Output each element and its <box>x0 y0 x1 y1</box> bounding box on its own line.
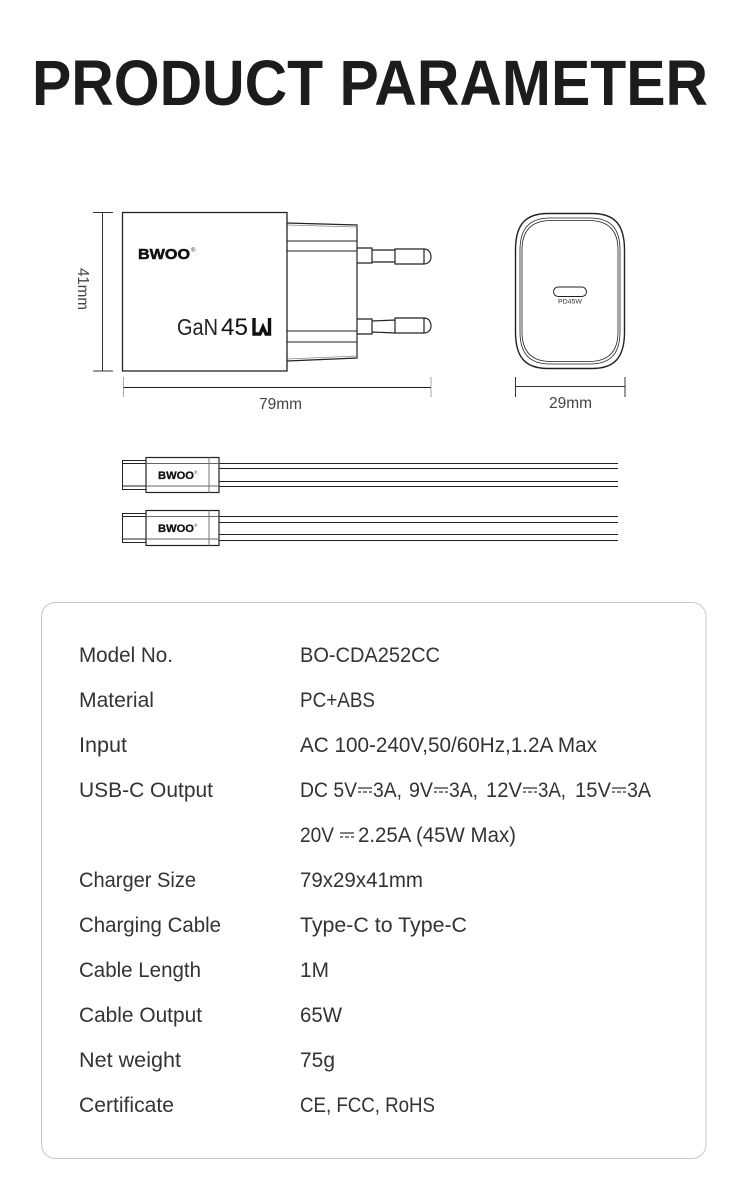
upper pin <box>357 248 431 264</box>
row: charger size: Charger Size <box>79 869 196 892</box>
cable logo: BWOO <box>158 523 194 535</box>
brand logo: BWOO on charger: BWOO <box>138 246 190 263</box>
icon: stylised W <box>254 318 270 334</box>
row: charger size: 79x29x41mm <box>300 869 423 892</box>
row: input: AC 100-240V,50/60Hz,1.2A Max <box>300 734 597 757</box>
brand logo: BWOO on charger: ® <box>191 247 196 254</box>
row: charging cable: Charging Cable <box>79 914 221 937</box>
dimension: 41mm height <box>74 212 113 371</box>
row: USB-C output: 9V <box>409 779 433 802</box>
dimension: 79mm length: 79mm <box>259 396 302 413</box>
GaN 45W label: 45 <box>221 314 248 341</box>
row: input <box>79 734 597 757</box>
row: charger size <box>79 869 423 892</box>
diagram: charger side view <box>122 212 431 371</box>
dimension: 29mm width <box>516 377 625 412</box>
dimension: 41mm height: 41mm <box>74 268 91 310</box>
row: USB-C output: USB-C Output <box>79 779 213 802</box>
GaN 45W label <box>177 314 270 341</box>
row: USB-C output continued: 2.25A (45W Max) <box>358 824 516 847</box>
row: net weight: Net weight <box>79 1049 181 1072</box>
icon: USB-C port <box>554 287 586 296</box>
row: USB-C output: 3A, <box>373 779 402 802</box>
diagram: upper USB-C cable <box>122 458 618 492</box>
row: model number <box>79 644 440 667</box>
row: charging cable <box>79 914 467 937</box>
row: model number: Model No. <box>79 644 173 667</box>
row: input: Input <box>79 734 127 757</box>
row: cable output: Cable Output <box>79 1004 202 1027</box>
charger body <box>122 212 287 371</box>
title: PRODUCT PARAMETER <box>32 47 708 119</box>
row: USB-C output continued: 20V <box>300 824 334 847</box>
row: USB-C output: 3A, <box>449 779 478 802</box>
GaN 45W label: GaN <box>177 314 218 340</box>
row: cable output <box>79 1004 342 1027</box>
row: certificate <box>79 1094 435 1117</box>
cable logo: BWOO <box>158 470 194 482</box>
plug housing <box>287 223 357 361</box>
dimension: 29mm width: 29mm <box>549 395 592 412</box>
lower pin <box>357 318 431 334</box>
row: net weight <box>79 1049 335 1072</box>
row: material: Material <box>79 689 154 712</box>
row: certificate: CE, FCC, RoHS <box>300 1094 435 1117</box>
row: net weight: 75g <box>300 1049 335 1072</box>
row: USB-C output: 3A <box>627 779 651 802</box>
row: cable length: Cable Length <box>79 959 201 982</box>
diagram: lower USB-C cable: ® <box>194 522 198 528</box>
row: USB-C output: 15V <box>575 779 611 802</box>
row: USB-C output: DC 5V <box>300 779 357 802</box>
row: USB-C output <box>79 779 651 802</box>
row: material: PC+ABS <box>300 689 375 712</box>
diagram: lower USB-C cable <box>122 510 618 546</box>
row: cable output: 65W <box>300 1004 342 1027</box>
dimension: 79mm length <box>124 377 431 413</box>
diagram: upper USB-C cable: ® <box>194 469 198 475</box>
row: material <box>79 689 375 712</box>
port label: PD45W <box>558 300 582 306</box>
diagram: charger front view <box>516 214 624 368</box>
row: certificate: Certificate <box>79 1094 174 1117</box>
row: cable length <box>79 959 329 982</box>
row: USB-C output: 3A, <box>538 779 566 802</box>
row: charging cable: Type-C to Type-C <box>300 914 467 937</box>
row: model number: BO-CDA252CC <box>300 644 440 667</box>
row: cable length: 1M <box>300 959 329 982</box>
row: USB-C output: 12V <box>486 779 522 802</box>
panel: specification table <box>42 602 706 1158</box>
